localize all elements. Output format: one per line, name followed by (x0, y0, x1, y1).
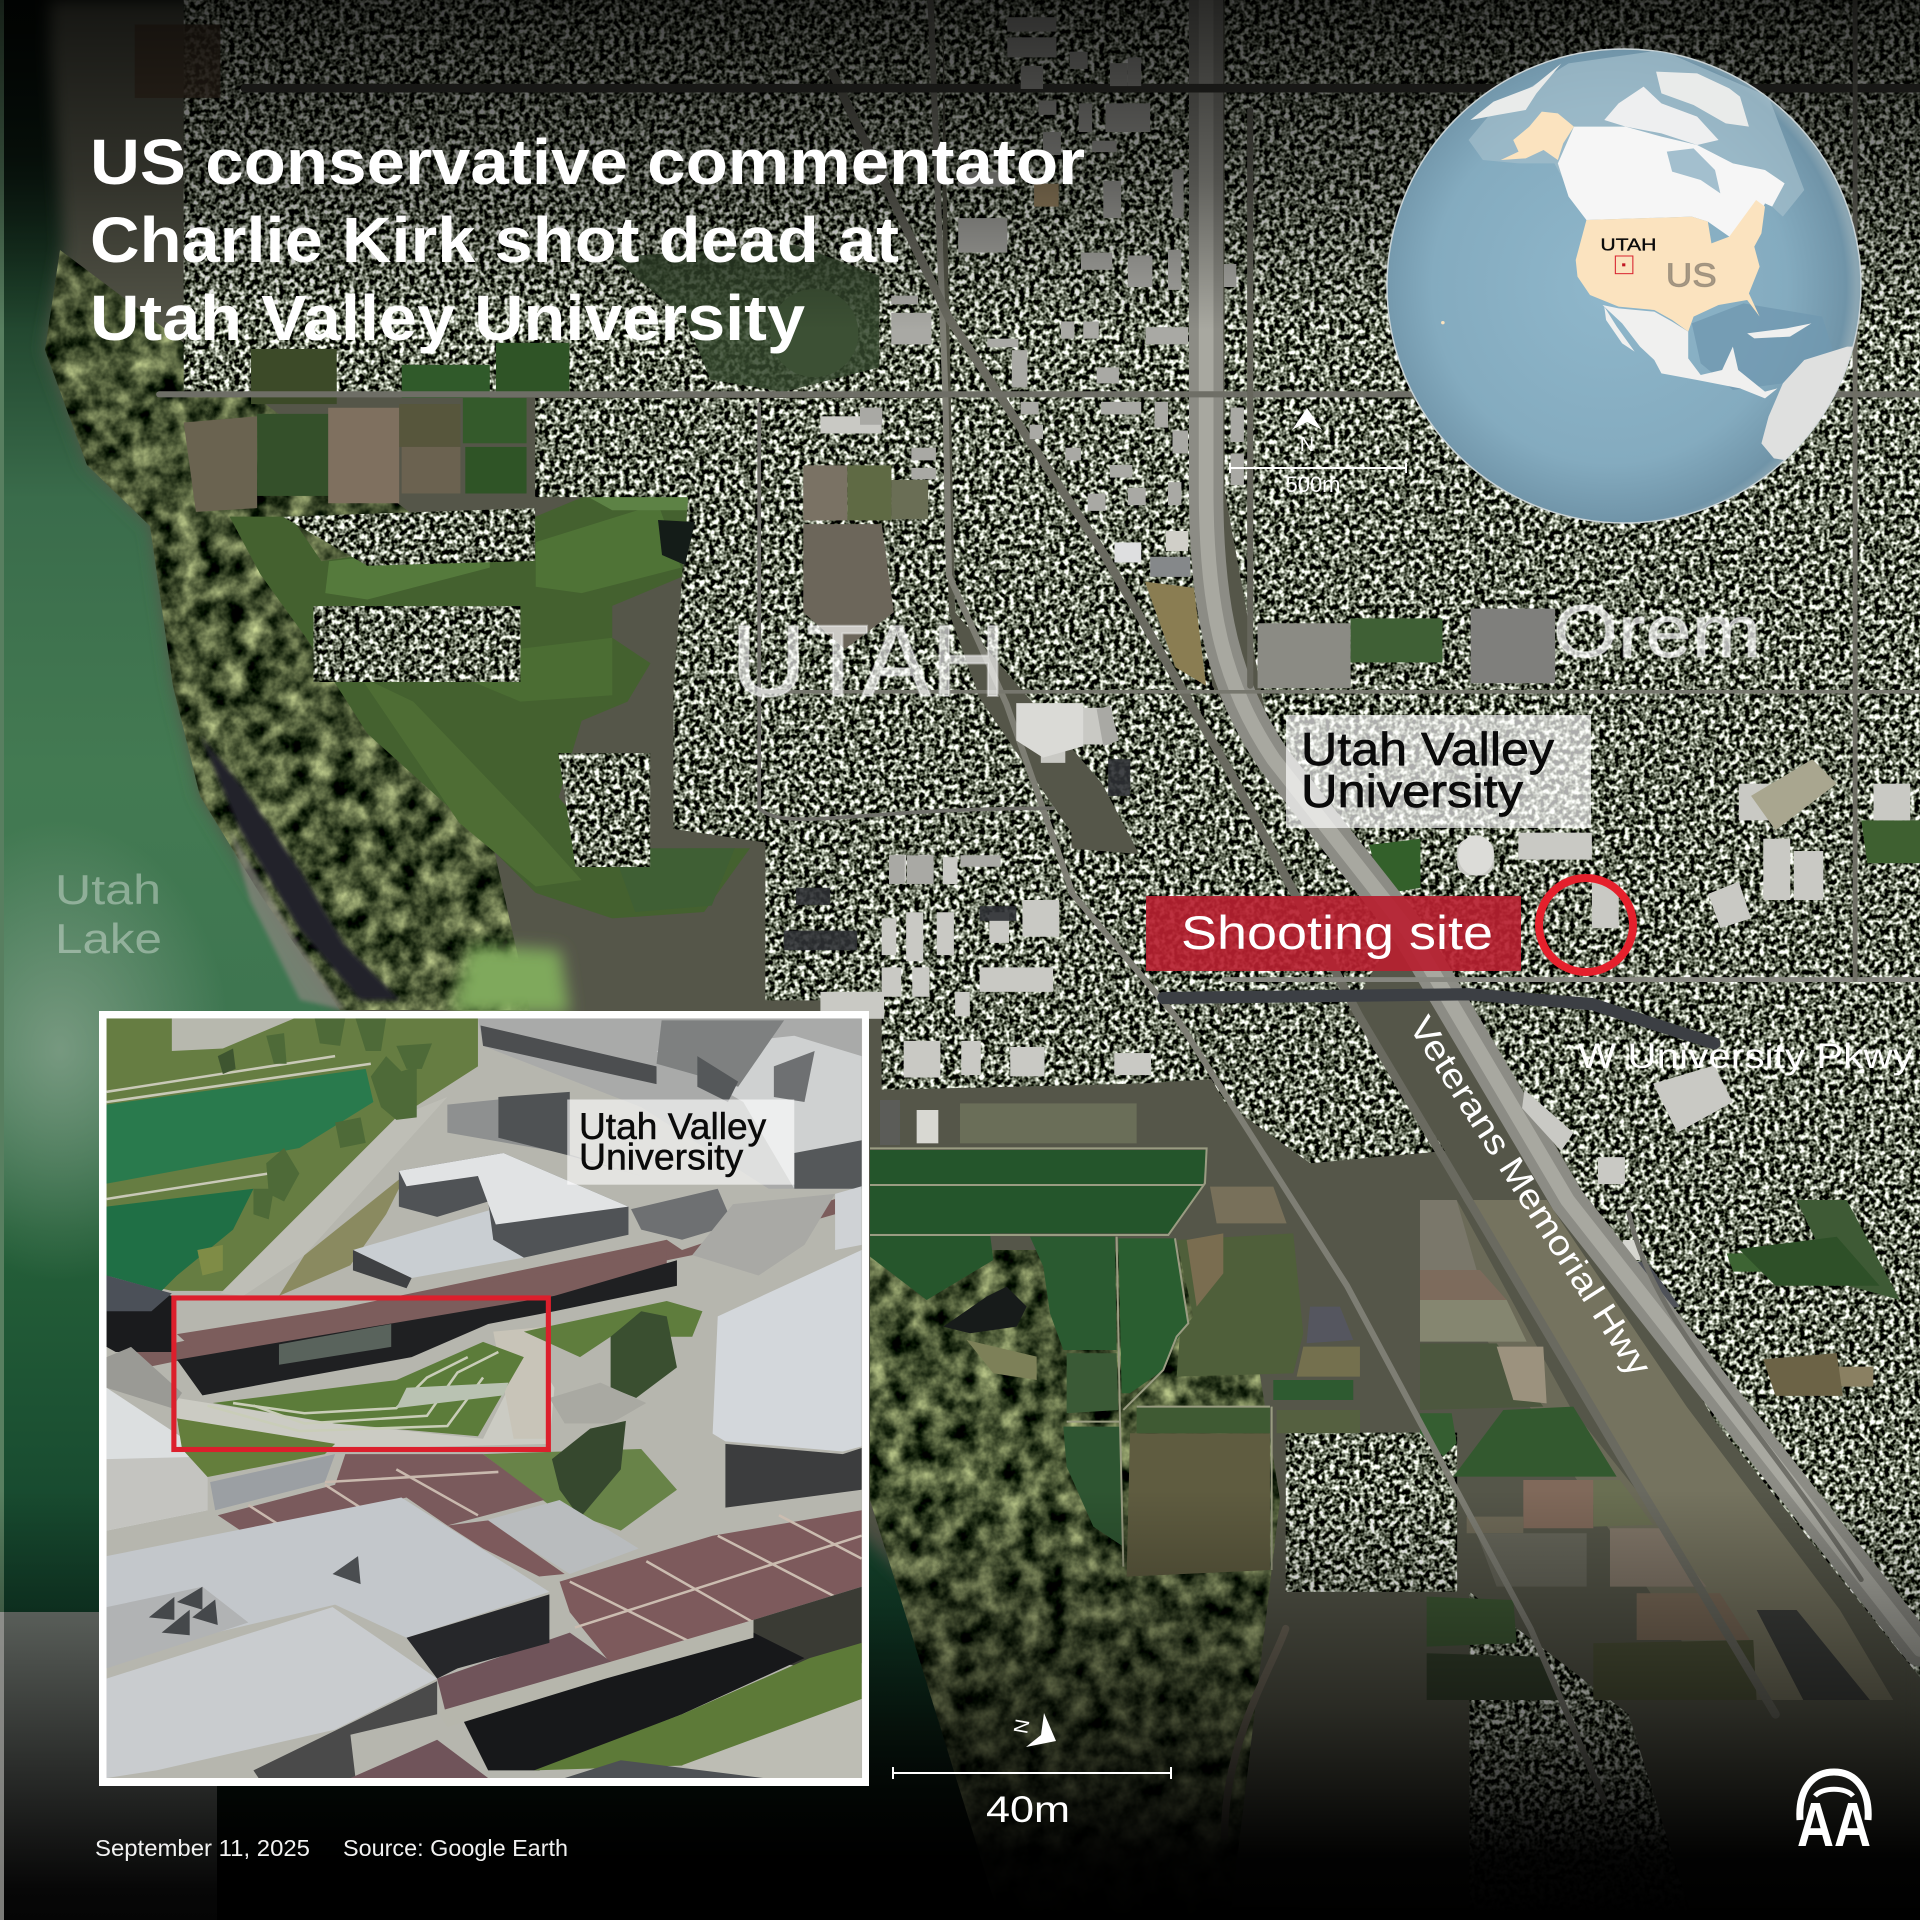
fields and rail corridor beside the highway (1420, 1200, 1900, 1700)
label: Utah Valley University (1286, 715, 1591, 828)
Anadolu Agency logo: AA (1797, 1791, 1871, 1860)
Russia (1470, 63, 1561, 120)
north arrow, upper (1292, 408, 1322, 456)
grey roof (353, 1209, 524, 1278)
road label: Veterans Memorial Hwy: Veterans Memorial Hwy (1401, 1009, 1659, 1383)
scale bar: 500m (1230, 463, 1406, 497)
Mexico and Central America (1602, 305, 1777, 398)
north arrow, upper: N (1300, 434, 1314, 456)
date and source (95, 1835, 568, 1861)
amphitheatre lawn (213, 1342, 524, 1436)
contiguous US (1576, 200, 1765, 332)
map label: UTAH: UTAH (731, 604, 1006, 718)
lower dark undercroft and lawn (753, 1587, 862, 1668)
Canada (1558, 127, 1785, 237)
Anadolu Agency logo (1797, 1772, 1871, 1860)
concrete apron (177, 1347, 554, 1449)
locator globe: US (1666, 258, 1717, 294)
brown plaza middle (218, 1454, 544, 1536)
date and source: September 11, 2025 (95, 1835, 310, 1861)
land, marsh and golf course (39, 0, 1300, 1846)
title (90, 126, 1085, 354)
map label: Utah Lake (55, 866, 162, 962)
left block (107, 1388, 208, 1531)
Alaska (1501, 112, 1574, 160)
inset photo panel (99, 1011, 869, 1786)
courtyard and trees (524, 1301, 702, 1357)
title: Utah Valley University (90, 282, 805, 354)
L building (399, 1153, 628, 1258)
trees upper (197, 1018, 432, 1276)
callout: Shooting site: Shooting site (1181, 906, 1493, 959)
callout: Shooting site (1146, 896, 1521, 971)
arctic islands (1604, 87, 1719, 145)
red box: shooting location (174, 1298, 548, 1449)
grass and pools (107, 1018, 478, 1291)
scale bar: 40m (893, 1767, 1171, 1830)
scale bar: 500m: 500m (1285, 472, 1341, 497)
road label: W University Pkwy: W University Pkwy (1578, 1037, 1914, 1076)
top buildings (478, 1018, 862, 1189)
inset label: Utah Valley University: Utah Valley (579, 1106, 767, 1147)
north arrow, lower (1009, 1713, 1056, 1747)
scale bar: 40m: 40m (986, 1789, 1070, 1830)
date and source: Source: Google Earth (343, 1835, 568, 1861)
map label: Orem: Orem (1553, 590, 1761, 673)
light roofs (820, 416, 1910, 1184)
label: Utah Valley University: Utah Valley (1301, 723, 1554, 775)
red circle marker (1539, 878, 1633, 972)
industrial buildings north of the highway bend (860, 17, 1494, 884)
walkway (131, 1199, 835, 1367)
label: Utah Valley University: University (1301, 765, 1523, 817)
lower plaza right (560, 1510, 862, 1663)
map label: Utah Lake: Lake (55, 915, 162, 962)
title: US conservative commentator (90, 126, 1085, 198)
Cuba (1747, 323, 1811, 338)
Greenland (1656, 72, 1749, 127)
Utah marker (1615, 256, 1633, 274)
north arrow, lower: N (1009, 1717, 1033, 1735)
shelf shading (1469, 50, 1804, 220)
title: Charlie Kirk shot dead at (90, 204, 899, 276)
farmland south of University Parkway (870, 1100, 1360, 1577)
inset label: Utah Valley University: University (579, 1136, 744, 1177)
map label: Utah Lake: Utah (55, 866, 161, 913)
locator globe (1387, 49, 1883, 523)
lake water (0, 0, 1300, 1920)
big roofs bottom (107, 1497, 549, 1658)
South America (1762, 346, 1853, 460)
inset label: Utah Valley University (567, 1099, 794, 1185)
locator globe: UTAH (1600, 234, 1656, 255)
golf pond (658, 520, 695, 565)
dark industrial shapes (784, 759, 1130, 950)
right big roof (713, 1250, 862, 1452)
